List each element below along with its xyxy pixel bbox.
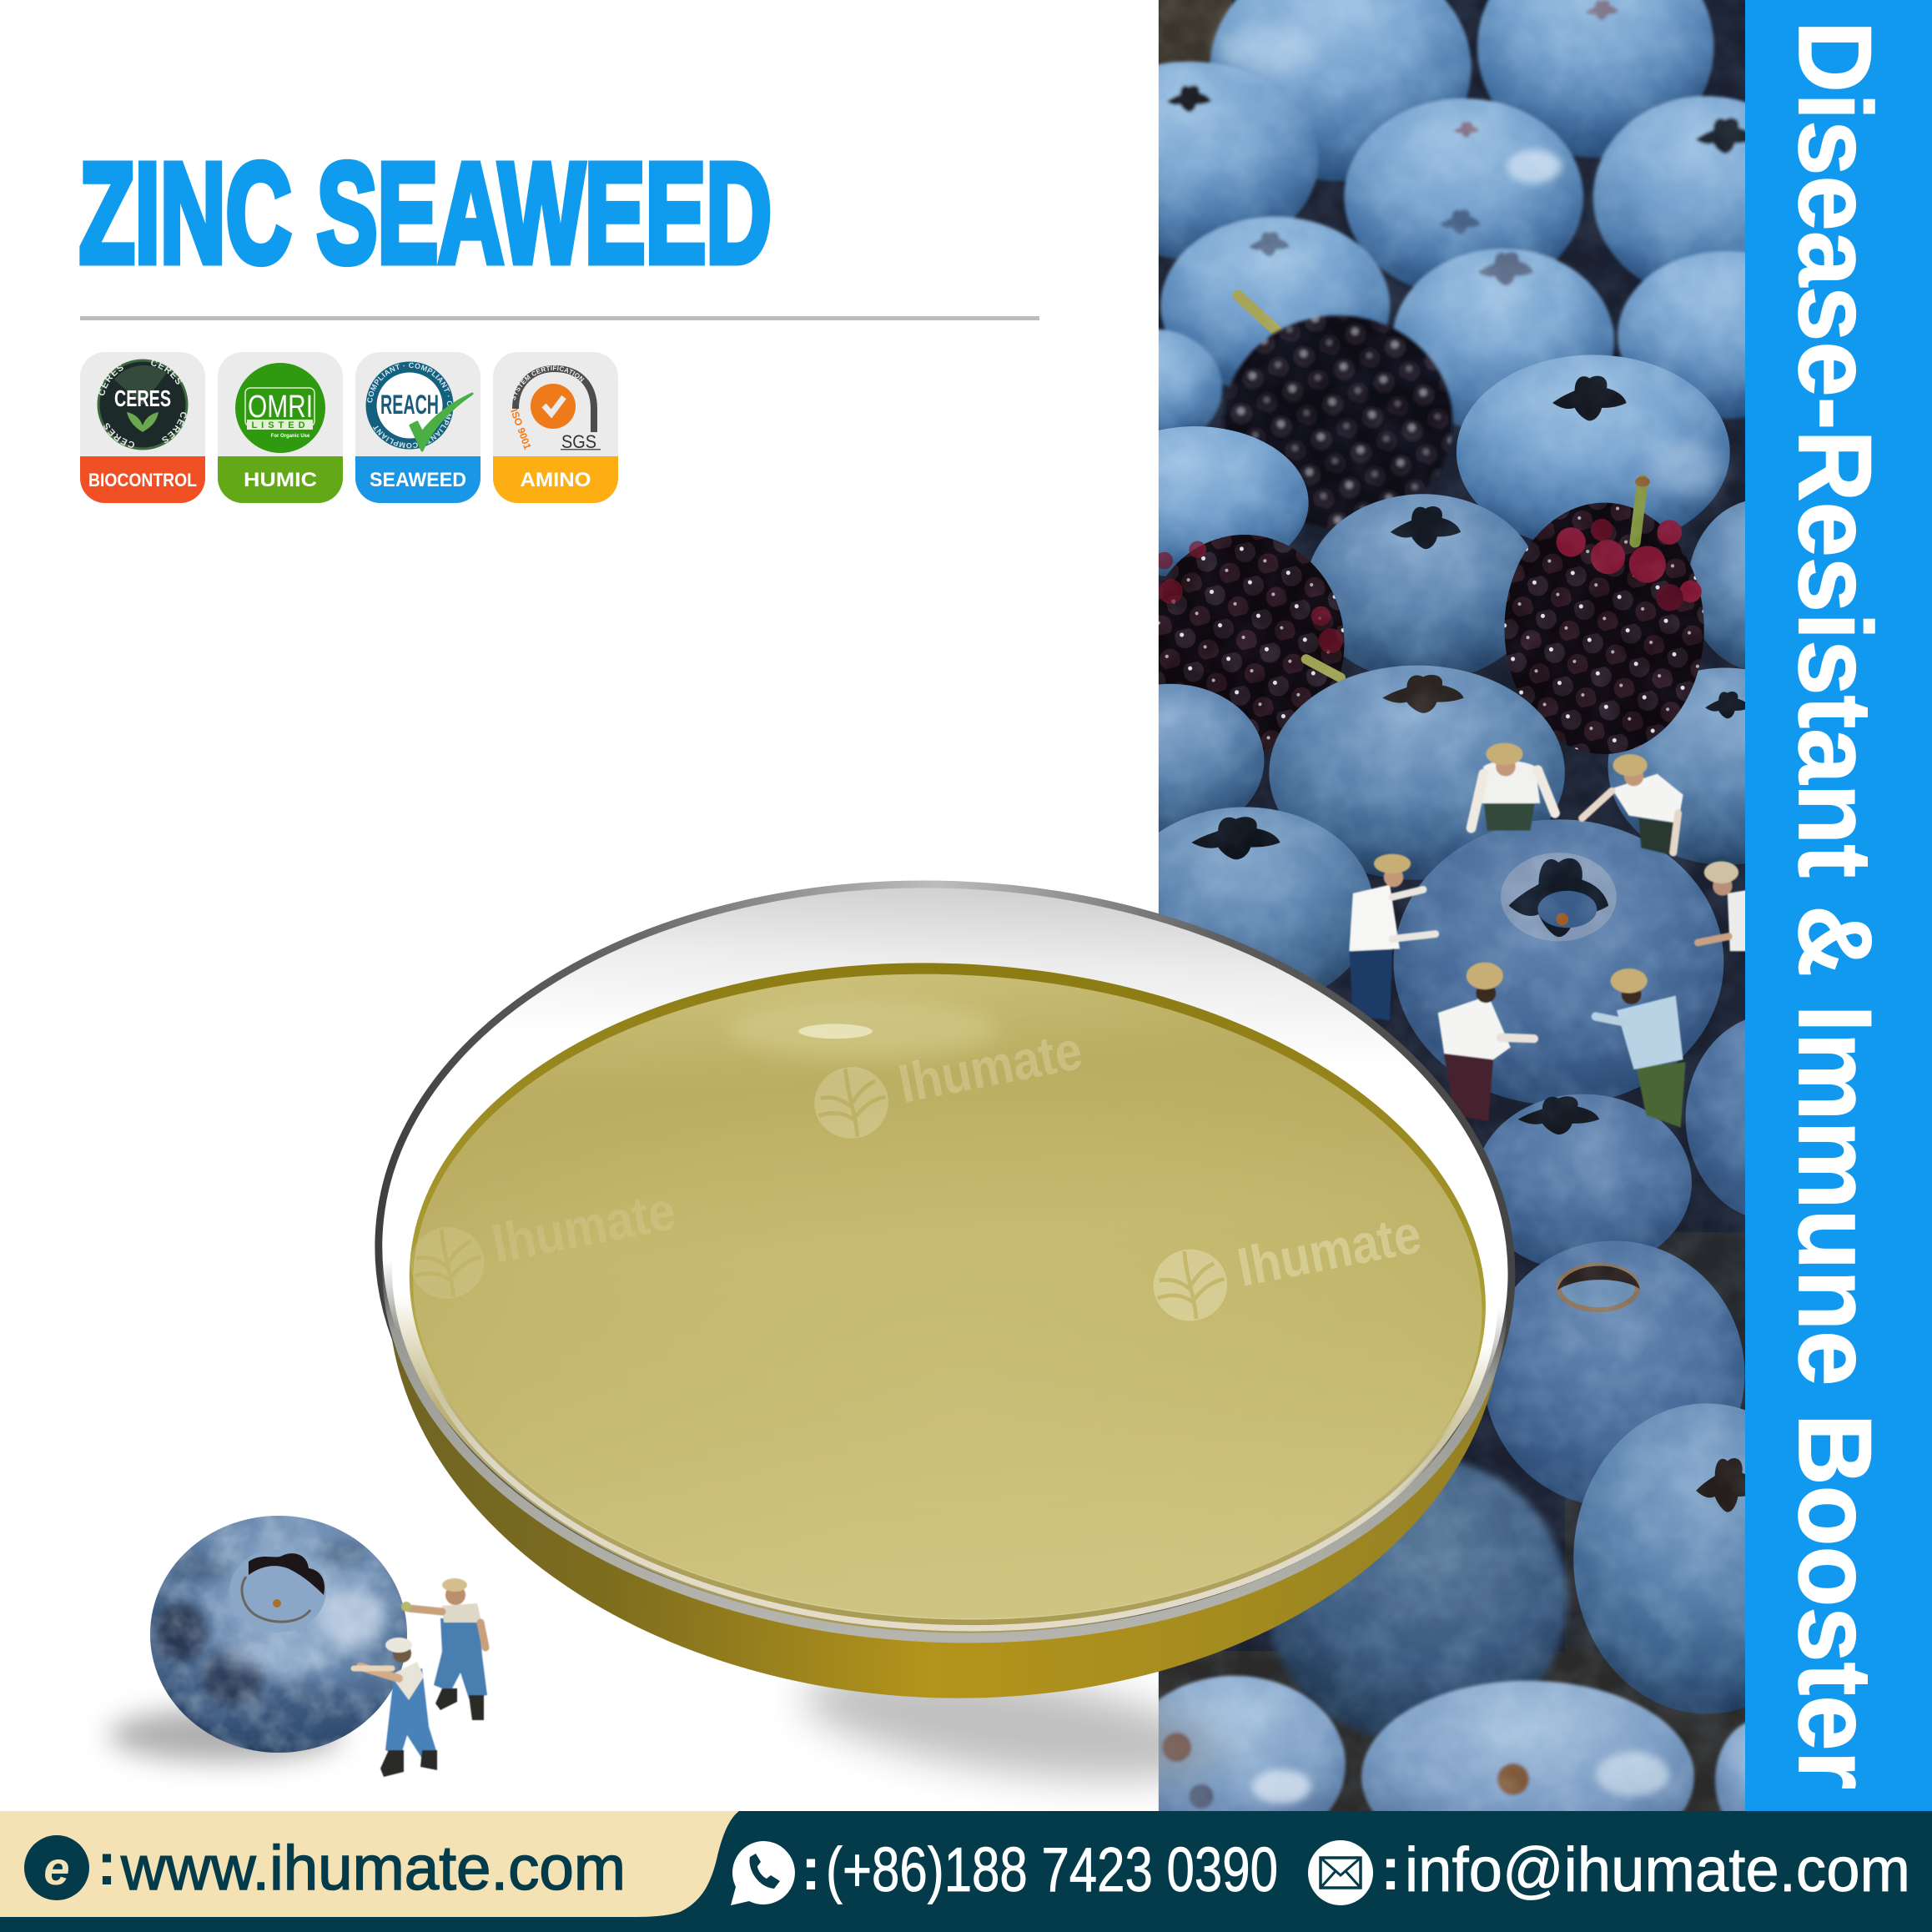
badge: seaweed xyxy=(355,352,480,503)
figure: top right worker xyxy=(1582,754,1683,857)
divider line xyxy=(80,316,1039,320)
petri dish with liquid xyxy=(362,860,1527,1800)
blackberry right xyxy=(1504,477,1704,754)
badge: biocontrol xyxy=(80,352,205,503)
footer bar xyxy=(0,1811,1932,1932)
phone section xyxy=(731,1834,1278,1905)
watermark: Ihumate left: Ihumate xyxy=(487,1180,680,1275)
website section xyxy=(0,1811,739,1917)
watermark: Ihumate centre: Ihumate xyxy=(893,1019,1087,1114)
email section: info@ihumate.com xyxy=(1405,1834,1910,1904)
badge: biocontrol: CERES xyxy=(151,360,182,385)
calyx crater xyxy=(1501,853,1617,941)
figurine: pushing worker xyxy=(354,1638,437,1777)
website section: www.ihumate.com xyxy=(120,1833,626,1903)
badge: humic xyxy=(218,352,343,503)
blackberry left upper xyxy=(1224,295,1452,527)
badge: seaweed: REACH xyxy=(380,390,439,420)
panel: vertical blue strip xyxy=(1745,0,1932,1811)
vertical slogan: Disease-Resistant & Immune Booster xyxy=(1777,21,1892,1789)
title: ZINC SEAWEED xyxy=(79,134,772,293)
icon: browser e xyxy=(24,1835,89,1900)
figure: left worker xyxy=(1349,854,1436,1020)
phone section: (+86)188 7423 0390 xyxy=(826,1834,1278,1904)
badge: biocontrol: CERES xyxy=(114,385,171,411)
icon: envelope xyxy=(1308,1840,1373,1905)
badge: seaweed: COMPLIANT · COMPLIANT · COMPLIANT · COMPLIANT xyxy=(367,362,452,449)
blackberry left lower xyxy=(1145,535,1344,752)
figurine: standing worker xyxy=(401,1578,487,1720)
badge: biocontrol: BIOCONTROL xyxy=(88,470,197,491)
watermark: Ihumate left xyxy=(405,1180,680,1305)
small blueberry with figurines xyxy=(108,1516,487,1777)
figure: front right worker xyxy=(1596,969,1686,1127)
email section: : xyxy=(1381,1836,1401,1903)
badge: amino: AMINO xyxy=(521,469,591,491)
figure: front left worker xyxy=(1438,963,1534,1121)
badge row xyxy=(80,352,618,503)
panel: blueberry photo xyxy=(1158,0,1745,1811)
badge: biocontrol: CERES xyxy=(103,423,134,448)
badge: amino: ISO 9001 xyxy=(508,407,534,451)
watermark: Ihumate right xyxy=(1148,1203,1426,1326)
website section: : xyxy=(97,1831,117,1898)
badge: seaweed: SEAWEED xyxy=(370,469,466,491)
badge: biocontrol: CERES xyxy=(98,365,123,395)
figure: top left worker xyxy=(1472,743,1555,831)
badge: humic: HUMIC xyxy=(244,469,317,491)
icon: browser e: e xyxy=(43,1842,70,1894)
blurred upper berries xyxy=(1158,0,1745,430)
phone section: : xyxy=(801,1836,821,1903)
miniature figures on berries xyxy=(1349,743,1749,1127)
badge: biocontrol: CERES xyxy=(162,412,187,443)
watermark: Ihumate centre xyxy=(809,1019,1087,1145)
bloom mottling xyxy=(1158,0,1749,1811)
badge: humic: LISTED xyxy=(251,420,309,430)
badge: amino: SGS xyxy=(561,431,596,452)
badge: amino: SYSTEM CERTIFICATION xyxy=(513,365,584,400)
badge: amino xyxy=(493,352,618,503)
icon: whatsapp phone xyxy=(731,1841,795,1905)
figure: right edge worker xyxy=(1698,861,1749,951)
badge: humic: For Organic Use xyxy=(271,434,310,439)
badge: humic: OMRI xyxy=(248,390,313,425)
watermark: Ihumate right: Ihumate xyxy=(1233,1203,1426,1298)
